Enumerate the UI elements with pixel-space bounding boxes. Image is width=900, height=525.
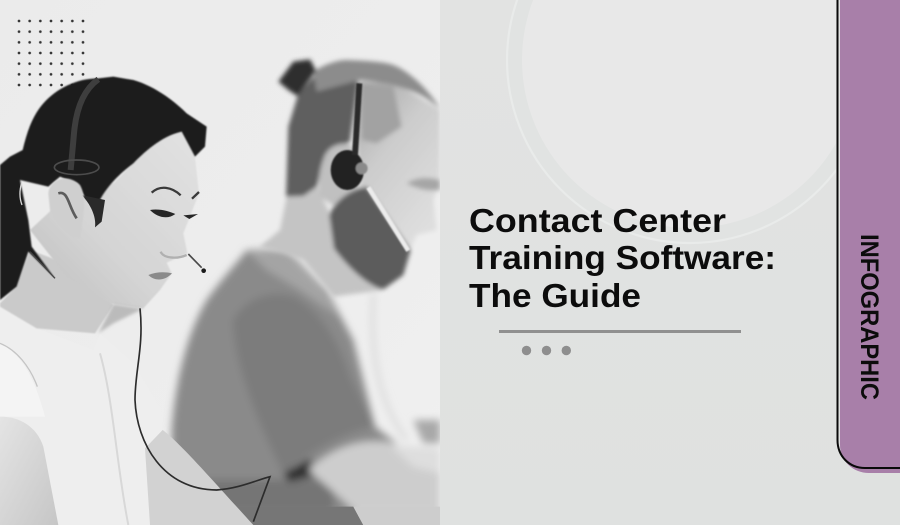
temple shadow	[362, 83, 402, 143]
divider line	[499, 330, 741, 333]
ear	[319, 144, 360, 210]
photo: two call-center agents wearing headsets	[0, 0, 440, 525]
ear	[48, 179, 84, 238]
headset ring	[54, 160, 99, 175]
eyebrows	[152, 188, 199, 199]
top hair band	[313, 60, 440, 108]
panel: right background	[440, 0, 900, 525]
man's head	[260, 59, 440, 297]
mic boom	[368, 187, 408, 251]
shirt	[0, 305, 162, 525]
headset band	[71, 79, 98, 170]
earpiece	[331, 150, 364, 190]
hair near cheek	[82, 195, 105, 227]
eyes	[150, 210, 198, 219]
headset cable	[135, 308, 270, 522]
closed eye shadow	[407, 178, 440, 190]
title	[469, 202, 776, 314]
hair tie highlight	[20, 183, 22, 205]
beard	[329, 187, 411, 289]
face	[357, 82, 440, 250]
hair	[0, 77, 207, 300]
dot grid	[14, 16, 88, 90]
inner ear	[58, 193, 77, 218]
three dots	[522, 346, 571, 355]
arms	[0, 417, 253, 525]
neck crease	[30, 252, 55, 278]
headband	[355, 83, 359, 155]
headset mic	[188, 254, 202, 268]
head details	[0, 77, 207, 333]
face	[30, 132, 199, 308]
earpiece joint	[356, 162, 368, 174]
mic tip	[201, 268, 206, 273]
black outline	[838, 0, 900, 468]
woman in foreground	[0, 77, 270, 525]
man's lower torso fill	[172, 507, 363, 525]
tab label: INFOGRAPHIC	[855, 234, 883, 400]
title: Contact Center	[469, 202, 726, 239]
nose shade	[161, 252, 187, 258]
lips	[148, 272, 172, 279]
bun	[278, 59, 316, 96]
jaw shadow	[98, 304, 143, 333]
side tab: infographic label	[838, 0, 900, 473]
man in background	[172, 59, 440, 525]
man's torso	[172, 248, 440, 513]
decorative circle	[506, 4, 836, 244]
title: Training Software:	[469, 239, 776, 276]
man's lower arm fill	[353, 507, 440, 525]
title: The Guide	[469, 277, 641, 314]
neck	[0, 250, 113, 333]
purple tab	[840, 0, 900, 473]
back of hair	[286, 72, 358, 197]
neck	[260, 187, 383, 297]
